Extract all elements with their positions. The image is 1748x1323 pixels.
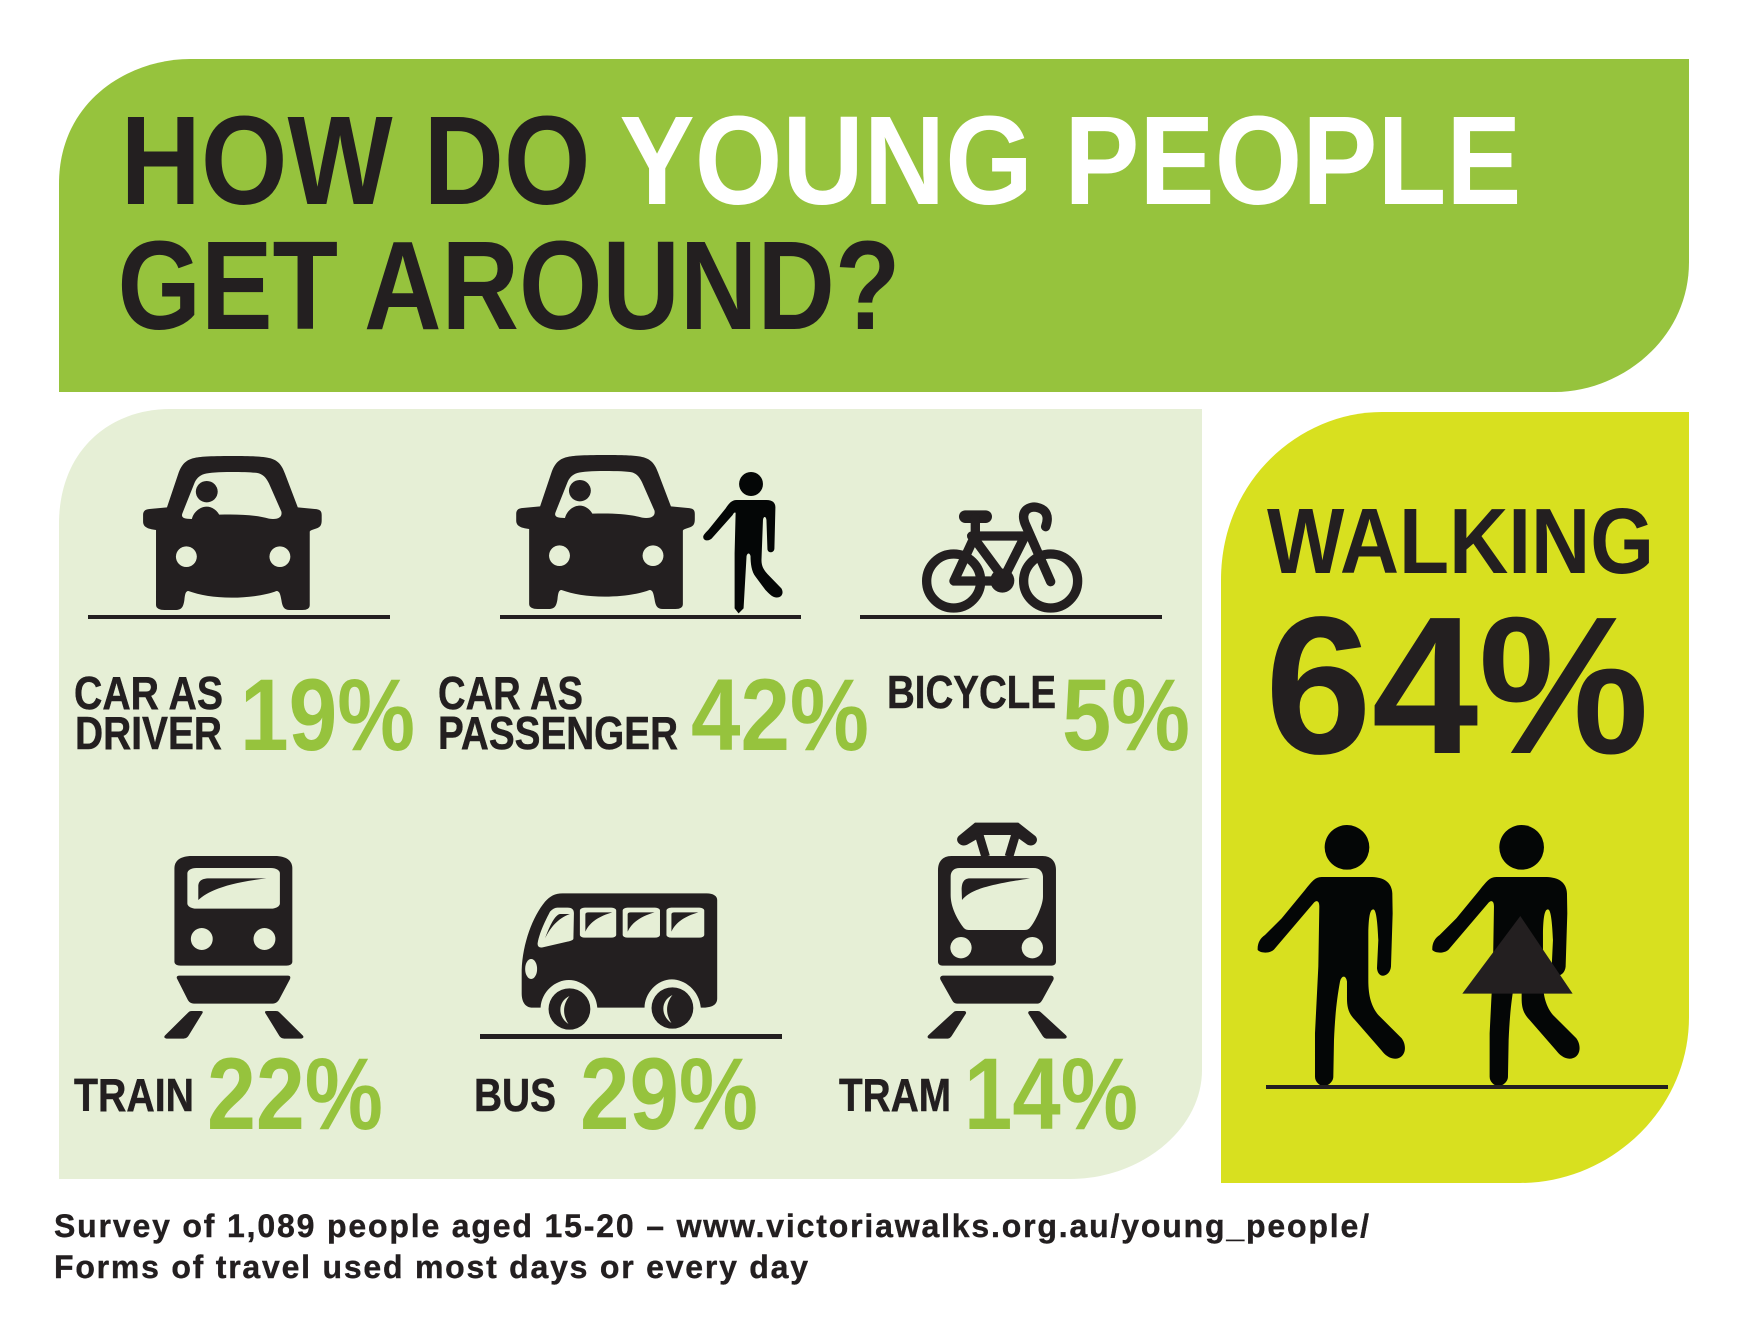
label: bicycle: BICYCLE [887,666,1056,718]
label: train: TRAIN [74,1069,194,1121]
label: tram: TRAM [839,1069,951,1121]
icon: car with driver [143,456,322,610]
icon: train [164,856,303,1039]
label: car as driver: CAR AS [74,667,223,719]
item: bus [474,893,782,1151]
value: 64%: 64% [1265,576,1649,795]
item: car as passenger: PASSENGER [438,707,678,759]
icon: bicycle [927,507,1078,608]
item: car as driver: DRIVER [75,707,222,759]
title banner [59,59,1689,392]
panel: walking [1221,412,1689,1183]
value: 29%: 29% [580,1037,758,1151]
value: 14%: 14% [964,1037,1138,1151]
value: 42%: 42% [691,658,869,772]
panel: other transport modes [59,409,1202,1179]
icon: car with passenger and pedestrian [516,455,783,613]
label: bus: BUS [474,1069,556,1121]
item: car as passenger [438,455,869,772]
footnote line two: Forms of travel used most days or every day [54,1249,808,1285]
footnote [54,1208,1369,1285]
icon: bus [522,893,717,1030]
icon: tram [928,823,1067,1039]
icon: male and female walkers [1258,825,1580,1086]
label: car as passenger: CAR AS [438,667,583,719]
value: 5%: 5% [1062,658,1190,772]
title: line one white: YOUNG PEOPLE [620,90,1522,231]
item: train [74,856,383,1151]
title: line one dark: HOW DO [120,90,590,231]
item: tram [839,823,1138,1151]
footnote line one: Survey of 1,089 people aged 15-20 – www.victoriawalks.org.au/young_people/ [54,1208,1369,1244]
value: 19%: 19% [240,658,415,772]
item: car as driver [74,456,415,772]
title: line two: GET AROUND? [118,215,900,356]
heading: walking: WALKING [1267,489,1654,593]
value: 22%: 22% [207,1037,383,1151]
item: bicycle [860,507,1190,772]
